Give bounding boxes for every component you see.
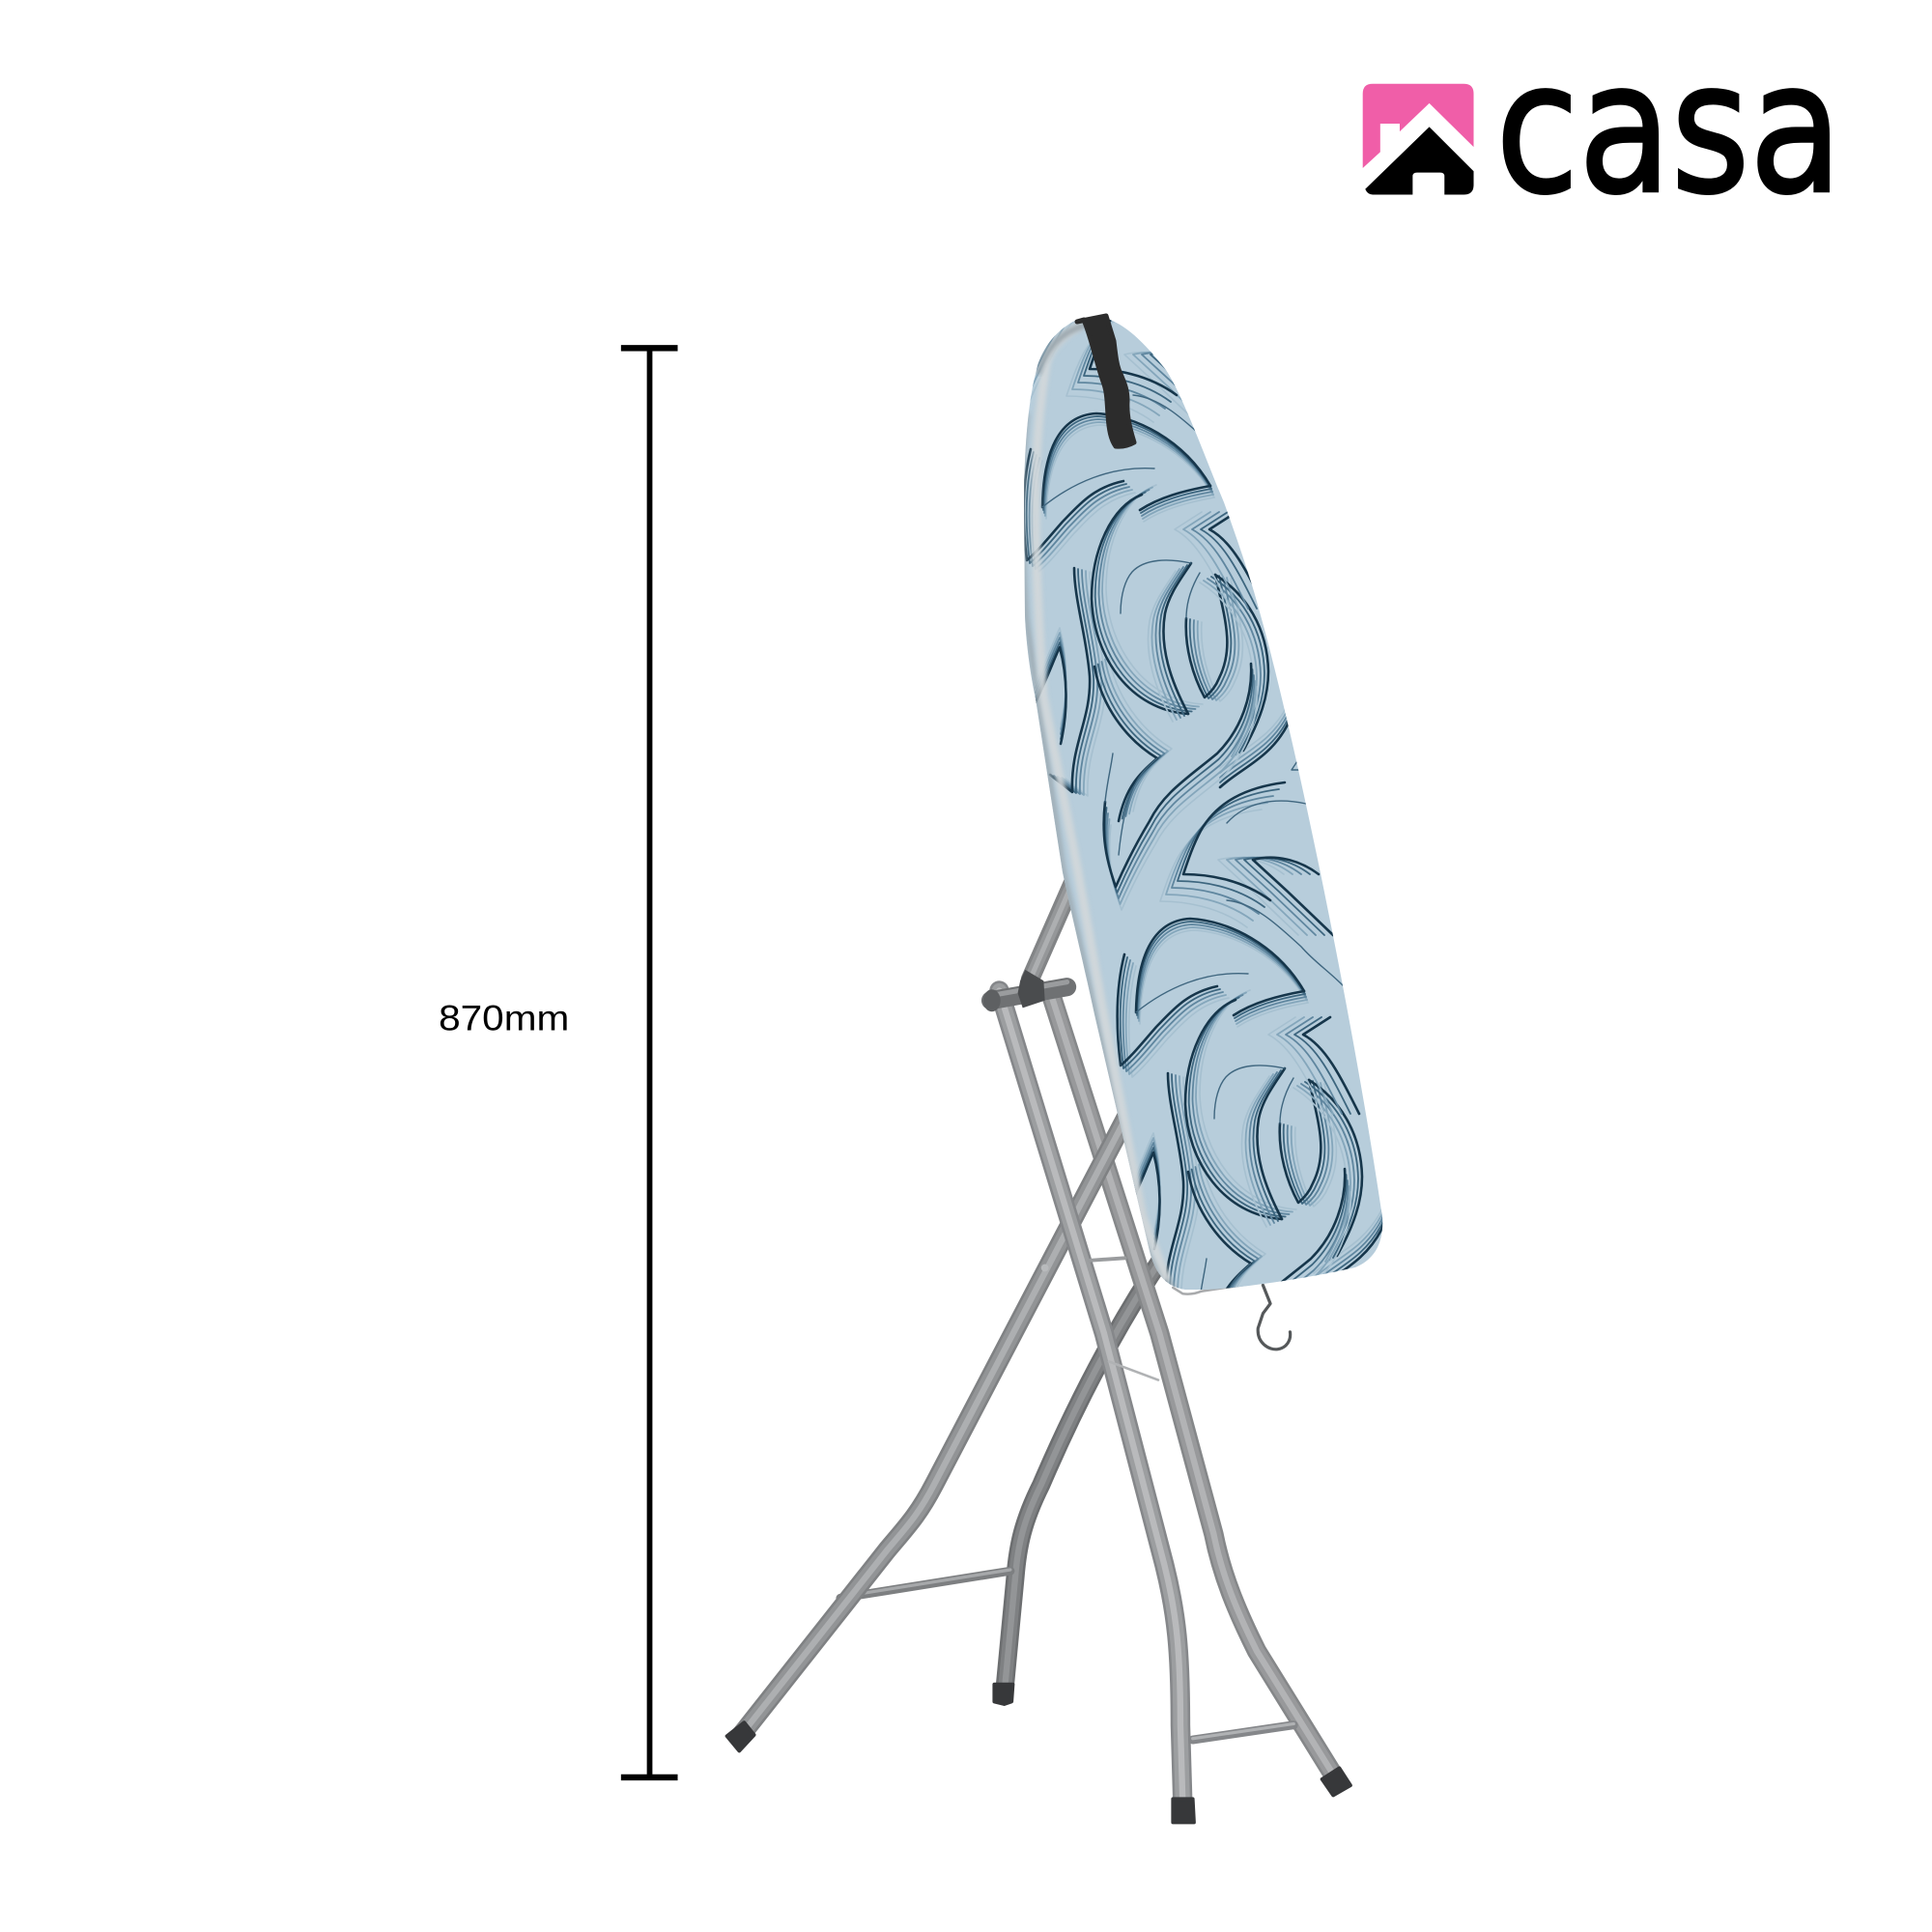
leg: rear left: [1005, 1254, 1164, 1694]
black strap: [1077, 316, 1134, 446]
icon: pink square with house: [1363, 84, 1474, 195]
wordmark: casa: [1495, 24, 1842, 235]
upper support arm: [1030, 856, 1084, 980]
feet: [727, 1685, 1350, 1822]
logo: casa: [1363, 24, 1842, 235]
cover pattern: [1024, 313, 1383, 1290]
pivot bolt: [1041, 1264, 1048, 1271]
ironing board stand: [727, 856, 1350, 1822]
height dimension line: [621, 345, 678, 1780]
rim shading: [1022, 415, 1174, 1290]
wires: [1090, 1258, 1251, 1380]
board cover: [1024, 319, 1383, 1290]
cross brace: rear: [840, 1570, 1010, 1598]
top crossbar and joint: [983, 970, 1067, 1011]
height label: 870mm: [439, 998, 569, 1037]
leg: front right: [999, 991, 1182, 1808]
leg: far right: [1050, 991, 1337, 1780]
cross brace: front: [1193, 1723, 1293, 1740]
ironing board: [1024, 313, 1383, 1290]
leg: front left: [739, 1084, 1144, 1737]
hook: [1258, 1285, 1291, 1350]
